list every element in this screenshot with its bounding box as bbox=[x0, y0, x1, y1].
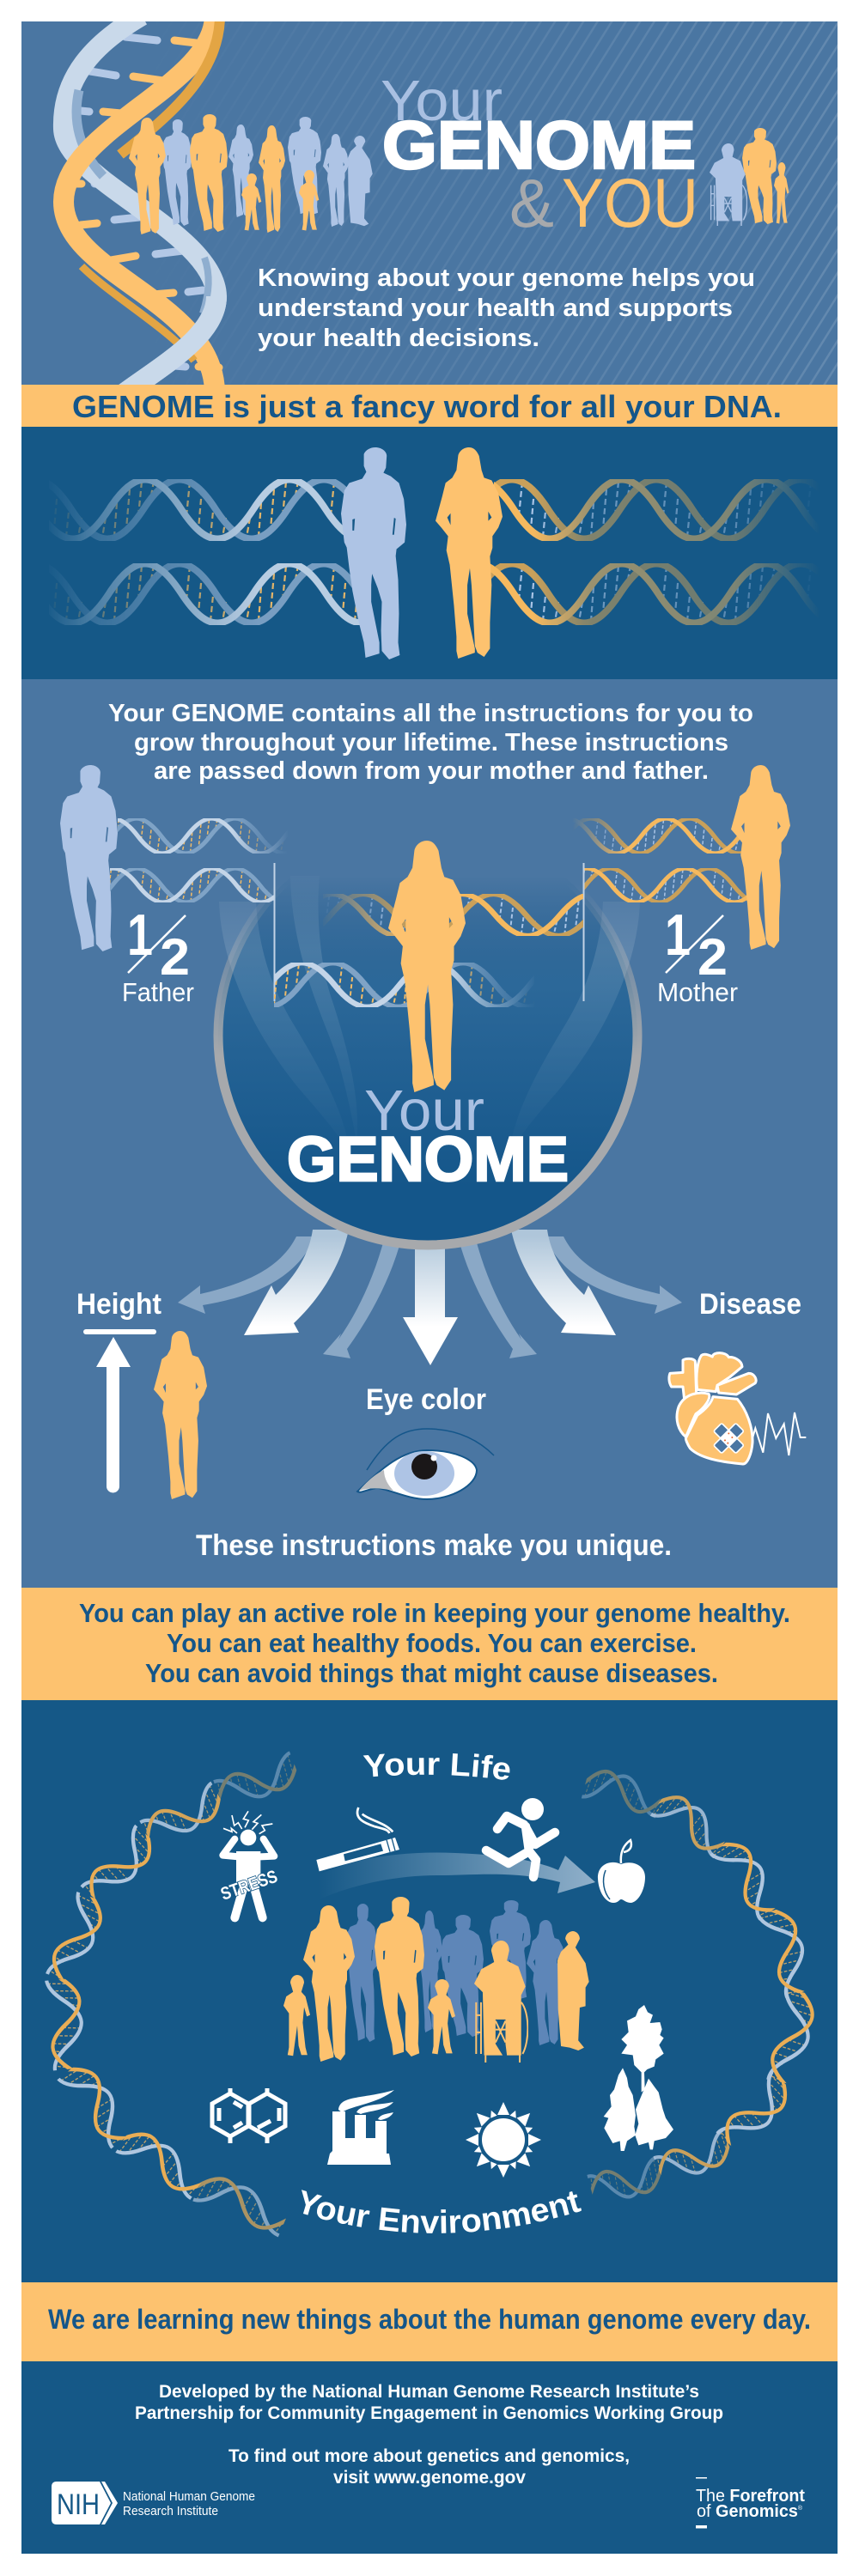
intro text: grow throughout your lifetime. These instructions bbox=[134, 729, 728, 756]
icon: woman height bbox=[154, 1331, 207, 1499]
banner: genome definition: GENOME is just a fancy word for all your DNA. bbox=[72, 389, 782, 424]
chart: father DNA strands bbox=[52, 479, 359, 625]
title: Your bbox=[381, 69, 503, 133]
label: Your GENOME bbox=[287, 1078, 569, 1194]
icon: large DNA double helix bbox=[63, 15, 220, 393]
intro text: Your GENOME contains all the instructions for you to bbox=[108, 700, 753, 727]
fraction: one half father: 1 bbox=[127, 902, 153, 968]
translucent swooshes bbox=[219, 876, 640, 1155]
icon: stress: STRESS bbox=[218, 1867, 280, 1905]
label: Your GENOME: GENOME bbox=[287, 1125, 569, 1194]
title: GENOME bbox=[382, 106, 696, 183]
genome circle bbox=[218, 826, 637, 1245]
banner: learning bbox=[21, 2282, 838, 2361]
arrow: life curve bbox=[318, 1853, 595, 1899]
panel: footer bbox=[21, 2361, 838, 2554]
icon: chemical rings bbox=[212, 2088, 285, 2143]
mother DNA bbox=[517, 818, 859, 1001]
icon: runner bbox=[486, 1798, 555, 1877]
label: Your GENOME: Your bbox=[364, 1078, 484, 1143]
intro text bbox=[258, 264, 755, 352]
intro text: are passed down from your mother and father. bbox=[154, 757, 709, 785]
label: Mother: Mother bbox=[657, 977, 738, 1007]
fraction: one half mother: 2 bbox=[698, 928, 728, 986]
chart: DNA ring right bbox=[489, 1735, 859, 2230]
label: Father: Father bbox=[122, 977, 194, 1007]
icon: eye bbox=[357, 1429, 494, 1499]
icon: factory bbox=[327, 2090, 394, 2165]
credits text: Partnership for Community Engagement in Genomics Working Group bbox=[135, 2403, 723, 2423]
fraction: one half mother: 1 bbox=[665, 902, 691, 968]
banner: active role: You can avoid things that might cause diseases. bbox=[145, 1658, 718, 1688]
credits text: visit www.genome.gov bbox=[333, 2468, 526, 2488]
intro text bbox=[108, 700, 753, 785]
logo: Forefront of Genomics: The Forefront bbox=[696, 2487, 805, 2506]
intro text: understand your health and supports bbox=[258, 295, 733, 322]
center woman silhouette bbox=[388, 841, 466, 1092]
icon: height arrow bbox=[83, 1329, 156, 1493]
label: Disease: Disease bbox=[699, 1288, 801, 1321]
panel: inheritance bbox=[21, 679, 859, 1588]
intro text: Knowing about your genome helps you bbox=[258, 264, 755, 292]
logo: NIH: Research Institute bbox=[123, 2504, 218, 2518]
banner: active role: You can eat healthy foods. You can exercise. bbox=[167, 1628, 697, 1658]
panel: life and environment bbox=[21, 1700, 838, 2282]
icon: stress bbox=[218, 1811, 280, 1917]
chart: mother DNA strands bbox=[490, 479, 813, 625]
title: YOU bbox=[562, 165, 698, 242]
title bbox=[381, 69, 698, 242]
credits text bbox=[135, 2382, 723, 2488]
logo: Forefront of Genomics: of Genomics bbox=[697, 2502, 799, 2521]
icon: cigarette bbox=[316, 1807, 399, 1871]
label: Eye color: Eye color bbox=[366, 1383, 486, 1416]
icon: apple bbox=[598, 1840, 645, 1903]
logo: Forefront of Genomics bbox=[696, 2477, 805, 2528]
closing text: These instructions make you unique. bbox=[196, 1529, 672, 1562]
icon: sun bbox=[466, 2102, 541, 2178]
center DNA strands bbox=[274, 894, 583, 1007]
banner: active role bbox=[21, 1588, 838, 1700]
logo: NIH bbox=[52, 2482, 255, 2524]
label: Height: Height bbox=[76, 1288, 161, 1321]
banner: active role: You can play an active role in keeping your genome healthy. bbox=[79, 1598, 790, 1628]
icon: man silhouette bbox=[341, 447, 406, 659]
panel: man and woman with DNA bbox=[0, 427, 859, 679]
chart: DNA ring left bbox=[0, 1716, 397, 2280]
title: & bbox=[509, 165, 554, 241]
panel: header bbox=[21, 15, 838, 393]
people group centre bbox=[283, 1897, 589, 2063]
people group right bbox=[710, 128, 789, 226]
credits text: To find out more about genetics and genomics, bbox=[228, 2446, 630, 2466]
mother silhouette bbox=[731, 765, 790, 950]
father DNA bbox=[63, 818, 408, 1001]
heading: Your Life: Your Life bbox=[362, 1753, 510, 1780]
credits text: Developed by the National Human Genome Research Institute’s bbox=[159, 2382, 699, 2402]
intro text: your health decisions. bbox=[258, 325, 539, 352]
fraction: one half father bbox=[127, 902, 190, 986]
father silhouette bbox=[60, 765, 118, 951]
fraction: one half mother bbox=[665, 902, 728, 986]
fraction: one half father: 2 bbox=[160, 928, 190, 986]
icon: heart bbox=[669, 1353, 806, 1464]
arrows from genome bbox=[178, 1230, 682, 1365]
logo: Forefront of Genomics: ® bbox=[798, 2505, 803, 2512]
people group left bbox=[129, 114, 373, 234]
icon: woman silhouette bbox=[436, 447, 503, 659]
heading: Your Environment: Your Environment bbox=[302, 2190, 582, 2233]
logo: NIH: NIH bbox=[57, 2488, 100, 2521]
logo: NIH: National Human Genome bbox=[123, 2489, 255, 2504]
icon: trees bbox=[604, 2005, 673, 2151]
